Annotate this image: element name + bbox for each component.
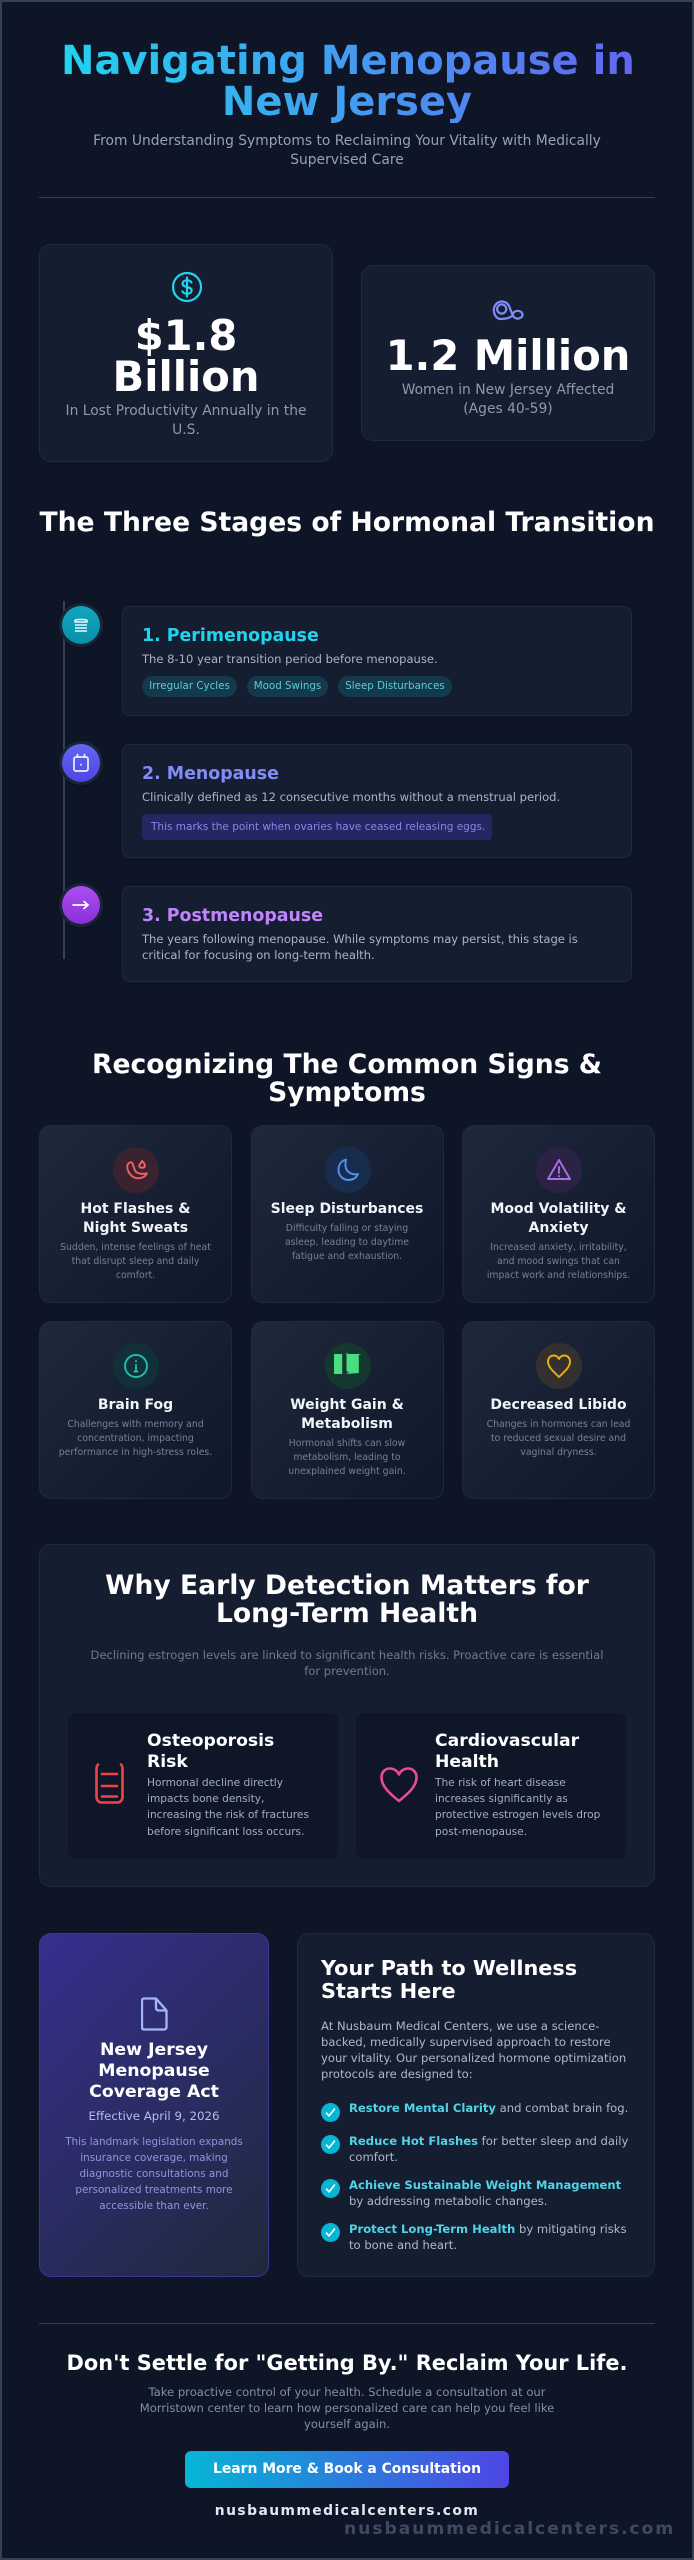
tags (142, 676, 452, 697)
benefit 3: by addressing metabolic changes. (349, 2194, 548, 2208)
symptom description: Difficulty falling or staying (286, 1223, 408, 1234)
timeline (63, 601, 65, 959)
panel: coverage act (39, 1933, 269, 2277)
icon: moon (324, 1147, 370, 1193)
icon: bone density (95, 1763, 124, 1804)
risk description: increases significantly as (435, 1793, 568, 1805)
section heading (105, 1570, 589, 1629)
benefit 2: comfort. (349, 2150, 398, 2164)
cta text: Take proactive control of your health. Schedule a consultation at our (148, 2385, 546, 2399)
symptom description (487, 1419, 630, 1458)
cta text (140, 2385, 554, 2431)
subtitle: From Understanding Symptoms to Reclaiming Your Vitality with Medically (93, 133, 601, 149)
symptom description: and mood swings that can (497, 1256, 620, 1267)
risk title (435, 1731, 580, 1772)
icon: flame (113, 1147, 159, 1193)
callout: This marks the point when ovaries have ceased releasing eggs. (151, 821, 485, 833)
symptom title: Sleep Disturbances (271, 1201, 423, 1217)
stat description: Women in New Jersey Affected (402, 382, 614, 398)
stat value (113, 311, 259, 401)
symptom card: sleep (250, 1125, 444, 1303)
symptom description (487, 1242, 630, 1281)
header (39, 38, 655, 198)
risk description (434, 1777, 600, 1838)
risk description: protective estrogen levels drop (435, 1809, 600, 1821)
symptom description: fatigue and exhaustion. (292, 1251, 402, 1262)
stat value: Billion (113, 352, 259, 401)
panel description (65, 2136, 243, 2212)
risk description: before significant loss occurs. (147, 1826, 304, 1838)
stat card: lost productivity (39, 244, 333, 462)
symptom description: Challenges with memory and (67, 1419, 204, 1430)
panel text: protocols are designed to: (321, 2067, 473, 2081)
symptom card: libido (462, 1321, 655, 1499)
stage card: menopause (122, 744, 632, 858)
section heading: Why Early Detection Matters for (105, 1570, 589, 1601)
check icon 4 (321, 2223, 340, 2242)
symptom description: metabolism, leading to (293, 1452, 401, 1463)
symptom title: Hot Flashes & (81, 1201, 190, 1217)
stage title: 3. Postmenopause (142, 906, 323, 926)
panel title: New Jersey (100, 2040, 208, 2060)
stage card: perimenopause (122, 606, 632, 716)
panel description: accessible than ever. (99, 2200, 209, 2212)
heading: signs and symptoms: Symptoms (268, 1077, 426, 1108)
icon: people (492, 300, 524, 320)
panel title (89, 2040, 219, 2102)
subtitle: Supervised Care (290, 152, 404, 168)
stage description: The 8-10 year transition period before menopause. (142, 652, 438, 666)
stat card: women affected (361, 265, 655, 441)
heading: signs and symptoms: Recognizing The Common Signs & (92, 1049, 602, 1080)
watermark: nusbaummedicalcenters.com (344, 2519, 675, 2539)
stat description: In Lost Productivity Annually in the (65, 403, 306, 419)
timeline dot: postmenopause (62, 886, 100, 924)
icon: warning (536, 1147, 582, 1193)
risk title: Health (435, 1752, 499, 1772)
symptom title (490, 1201, 626, 1236)
symptom description: that disrupt sleep and daily (72, 1256, 199, 1267)
symptom title: Weight Gain & (290, 1397, 404, 1413)
symptom description: Changes in hormones can lead (487, 1419, 630, 1430)
website: nusbaummedicalcenters.com (215, 2503, 479, 2519)
section intro: for prevention. (304, 1664, 390, 1678)
benefit 3 (349, 2178, 621, 2208)
panel heading: Your Path to Wellness (321, 1956, 577, 1980)
section heading: Long-Term Health (216, 1598, 478, 1629)
callout (142, 814, 492, 840)
symptom description (59, 1419, 212, 1458)
symptom description: unexplained weight gain. (288, 1466, 406, 1477)
risk description: The risk of heart disease (435, 1777, 566, 1789)
symptom description (285, 1223, 409, 1262)
symptom description: Hormonal shifts can slow (289, 1438, 405, 1449)
benefit 4: to bone and heart. (349, 2238, 457, 2252)
icon: scale block (324, 1343, 370, 1389)
check icon 3 (321, 2179, 340, 2198)
symptom card: brain fog (39, 1321, 232, 1499)
risk title: Cardiovascular (435, 1731, 579, 1751)
symptom title: Mood Volatility & (490, 1201, 626, 1217)
symptom description: Sudden, intense feelings of heat (60, 1242, 211, 1253)
risk description: Hormonal decline directly (147, 1777, 283, 1789)
cta button (185, 2451, 509, 2488)
subtitle (93, 133, 601, 168)
stat description: (Ages 40-59) (463, 400, 553, 416)
stage title: 2. Menopause (142, 764, 279, 784)
timeline dot: menopause (62, 744, 100, 782)
icon: heart (536, 1343, 582, 1389)
stage description: The years following menopause. While symptoms may persist, this stage is (142, 932, 578, 946)
symptom title (290, 1397, 404, 1432)
symptom card: weight (250, 1321, 444, 1499)
tags: Sleep Disturbances (345, 680, 445, 692)
title: New Jersey (222, 79, 472, 125)
icon: document (141, 1997, 168, 2031)
title (61, 41, 633, 123)
risk card: cardiovascular (356, 1713, 626, 1859)
symptom title (81, 1201, 190, 1236)
panel text: At Nusbaum Medical Centers, we use a science- (321, 2018, 599, 2032)
panel description: diagnostic consultations and (80, 2168, 228, 2180)
benefit 2: Reduce Hot Flashes for better sleep and daily (349, 2134, 628, 2148)
icon: heart (380, 1767, 418, 1802)
stage description (142, 932, 578, 962)
symptom description: performance in high-stress roles. (59, 1447, 212, 1458)
panel: early detection (39, 1544, 655, 1887)
stage description: critical for focusing on long-term health. (142, 948, 375, 962)
panel description: This landmark legislation expands (65, 2136, 243, 2148)
panel: path to wellness (297, 1933, 655, 2277)
benefit 3: Achieve Sustainable Weight Management (349, 2178, 621, 2192)
stat description (402, 382, 614, 416)
symptom title: Brain Fog (98, 1397, 173, 1413)
stat value: 1.2 Million (386, 331, 630, 380)
check icon 2 (321, 2135, 340, 2154)
check icon 1 (321, 2103, 340, 2122)
risk description: impacts bone density, (147, 1793, 264, 1805)
icon: info (113, 1343, 159, 1389)
risk title: Risk (147, 1752, 188, 1772)
symptom description: impact work and relationships. (487, 1270, 630, 1281)
tags: Mood Swings (254, 680, 321, 692)
section intro: Declining estrogen levels are linked to significant health risks. Proactive care is essential (91, 1648, 603, 1662)
stage description: Clinically defined as 12 consecutive months without a menstrual period. (142, 790, 560, 804)
panel heading: Starts Here (321, 1979, 456, 2003)
symptom description: asleep, leading to daytime (285, 1237, 409, 1248)
panel title: Menopause (98, 2061, 210, 2081)
symptom card: hot flashes (39, 1125, 232, 1303)
panel heading (320, 1956, 577, 2003)
symptom title: Night Sweats (83, 1220, 188, 1236)
symptom card: mood (462, 1125, 655, 1303)
stat value: $1.8 (135, 311, 237, 360)
cta text: Morristown center to learn how personalized care can help you feel like (140, 2401, 554, 2415)
effective date: Effective April 9, 2026 (89, 2109, 219, 2123)
panel text (321, 2018, 626, 2081)
timeline dot: perimenopause (62, 606, 100, 644)
benefit 4: Protect Long-Term Health by mitigating risks (349, 2222, 627, 2236)
symptom title: Anxiety (529, 1220, 588, 1236)
stage title: 1. Perimenopause (142, 626, 319, 646)
stage card: postmenopause (122, 886, 632, 982)
symptom title: Decreased Libido (490, 1397, 627, 1413)
panel text: your vitality. Our personalized hormone optimization (321, 2051, 626, 2065)
symptom description: Increased anxiety, irritability, (490, 1242, 627, 1253)
heading: signs and symptoms (92, 1049, 602, 1108)
symptom description: comfort. (116, 1270, 155, 1281)
symptom description: vaginal dryness. (520, 1447, 597, 1458)
symptom description: to reduced sexual desire and (491, 1433, 626, 1444)
symptom description (60, 1242, 211, 1281)
benefit 4 (349, 2222, 627, 2252)
symptom title: Metabolism (301, 1416, 393, 1432)
title: Navigating Menopause in (61, 38, 635, 84)
cta text: yourself again. (304, 2417, 390, 2431)
cta button: Learn More & Book a Consultation (213, 2461, 481, 2477)
panel title: Coverage Act (89, 2082, 219, 2102)
risk description: increasing the risk of fractures (147, 1809, 309, 1821)
panel text: backed, medically supervised approach to restore (321, 2035, 611, 2049)
risk description: post-menopause. (435, 1826, 527, 1838)
tags: Irregular Cycles (149, 680, 230, 692)
risk title: Osteoporosis (147, 1731, 274, 1751)
stat description: U.S. (172, 422, 200, 438)
panel description: personalized treatments more (75, 2184, 233, 2196)
panel description: insurance coverage, making (80, 2152, 228, 2164)
risk card: osteoporosis (68, 1713, 338, 1859)
benefit 1: Restore Mental Clarity and combat brain fog. (349, 2101, 628, 2115)
risk description (147, 1777, 309, 1838)
icon: dollar (172, 272, 202, 302)
footer call to action (67, 2351, 627, 2519)
cta heading: Don't Settle for "Getting By." Reclaim Your Life. (67, 2351, 627, 2375)
symptom description (288, 1438, 406, 1477)
checklist (321, 2101, 628, 2252)
heading: three stages: The Three Stages of Hormonal Transition (39, 507, 655, 538)
benefit 2 (349, 2134, 628, 2164)
risk title (147, 1731, 274, 1772)
symptom description: concentration, impacting (77, 1433, 194, 1444)
stat description (65, 403, 306, 438)
section intro (91, 1648, 603, 1678)
